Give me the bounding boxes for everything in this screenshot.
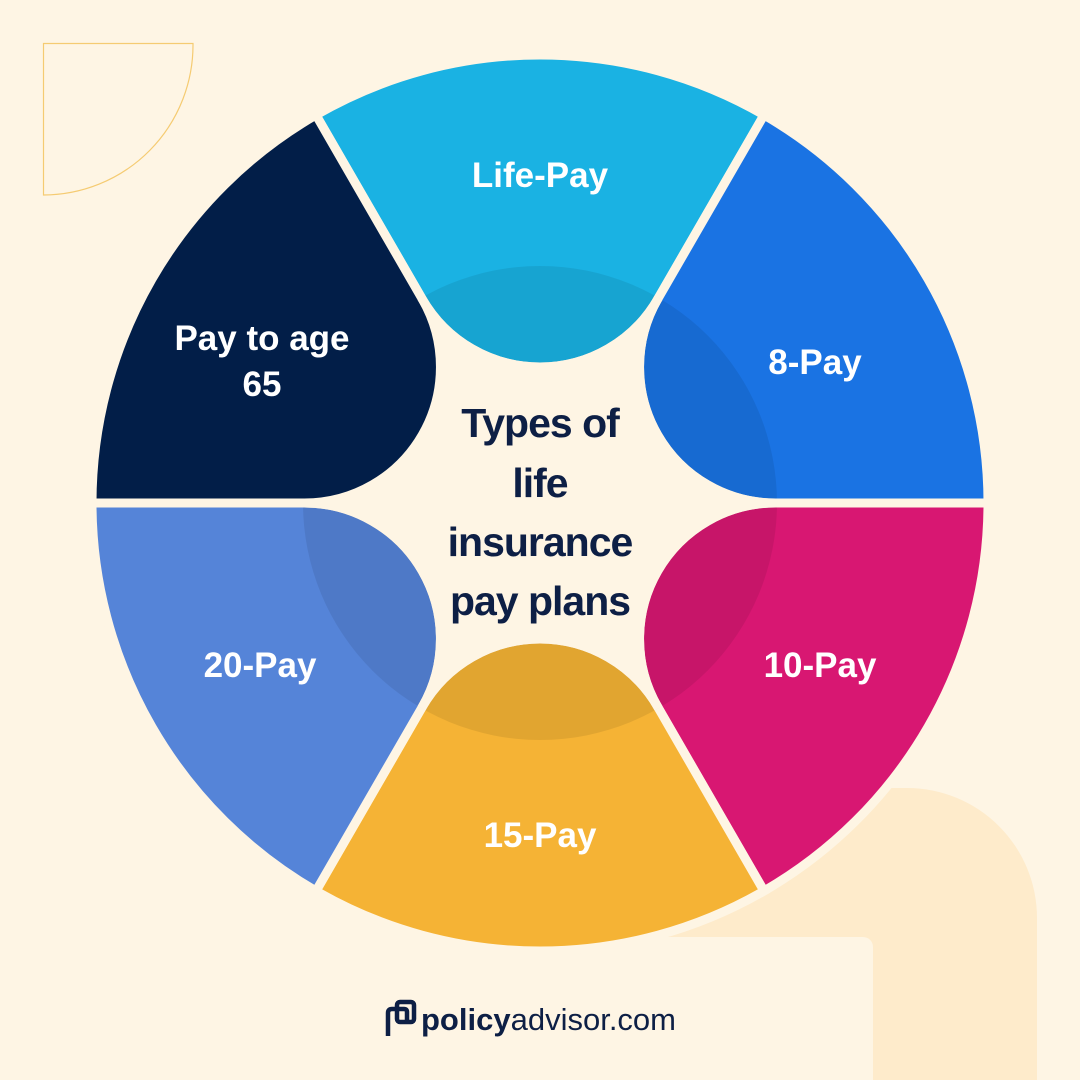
label: 8-Pay: 8-Pay bbox=[768, 343, 862, 382]
label: Life-Pay: Life-Pay bbox=[472, 156, 609, 195]
segment: 20-Pay bbox=[40, 377, 534, 921]
label: Pay to age 65: 65 bbox=[243, 365, 281, 404]
logo text: policyadvisor.com bbox=[421, 1002, 676, 1037]
segment: Life-Pay bbox=[316, 55, 764, 367]
title: pay plans bbox=[450, 578, 630, 624]
title: life bbox=[512, 460, 568, 506]
label: 20-Pay: 20-Pay bbox=[204, 646, 317, 685]
segment labels bbox=[174, 156, 877, 855]
title: Types of bbox=[461, 400, 620, 446]
wheel bbox=[40, 55, 1040, 951]
label: 15-Pay: 15-Pay bbox=[484, 816, 597, 855]
title: insurance bbox=[448, 519, 633, 565]
label: Pay to age 65: Pay to age bbox=[174, 319, 350, 358]
segment: 10-Pay bbox=[546, 377, 1040, 921]
icon: logo bbox=[388, 1002, 414, 1036]
segment: Pay to age 65 bbox=[40, 85, 534, 629]
segment: 15-Pay bbox=[316, 639, 764, 951]
logo bbox=[388, 1002, 676, 1037]
label: 10-Pay: 10-Pay bbox=[764, 646, 877, 685]
segment: 8-Pay bbox=[546, 85, 1040, 629]
inner darker overlay bbox=[303, 266, 777, 740]
decoration: quarter circle outline bbox=[44, 44, 193, 195]
decoration: bottom-right orange shape bbox=[600, 788, 1037, 1080]
decoration: cream rounded rect bbox=[560, 937, 873, 1080]
